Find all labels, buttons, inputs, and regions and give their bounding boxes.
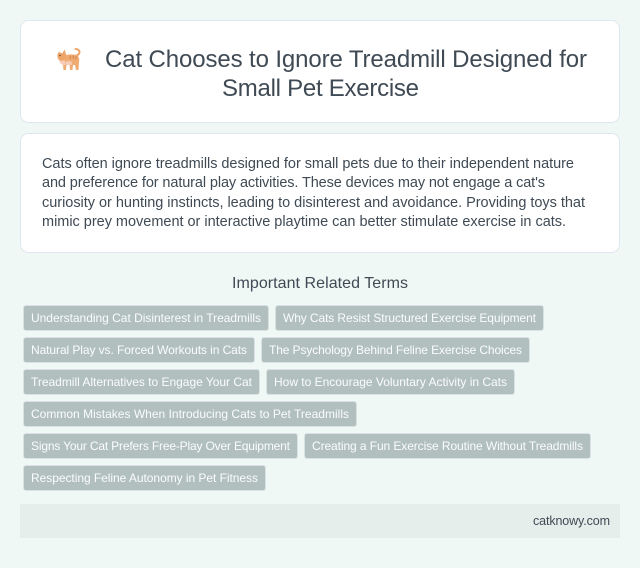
tag: Natural Play vs. Forced Workouts in Cats: [31, 343, 247, 357]
tag: Common Mistakes When Introducing Cats to Pet Treadmills: [31, 407, 349, 421]
tag: [266, 370, 514, 394]
tag: [262, 338, 530, 362]
panel: description card: [20, 134, 620, 252]
text block: description: curiosity or hunting instincts, leading to disinterest and avoidance. Providing toys that: [42, 195, 585, 211]
footer: catknowy.com: [533, 514, 610, 528]
footer: [20, 504, 620, 538]
text block: description: [42, 156, 585, 230]
panel: title card: [20, 20, 620, 122]
tag: [304, 434, 590, 458]
tag: Respecting Feline Autonomy in Pet Fitness: [31, 471, 258, 485]
text block: description: mimic prey movement or interactive playtime can better stimulate exercise in cats.: [42, 214, 566, 230]
title: Small Pet Exercise: [222, 75, 419, 102]
tag: [24, 402, 356, 426]
text block: description: and preference for natural play activities. These devices may not engage a cat's: [42, 175, 545, 191]
icon: cat: [57, 49, 80, 70]
tag: [24, 434, 298, 458]
tag list: related terms: [24, 306, 590, 490]
heading: related terms: Important Related Terms: [232, 275, 408, 292]
tag: Signs Your Cat Prefers Free-Play Over Equipment: [31, 439, 291, 453]
tag: Creating a Fun Exercise Routine Without Treadmills: [312, 439, 583, 453]
tag: [24, 370, 260, 394]
tag: Why Cats Resist Structured Exercise Equipment: [283, 311, 537, 325]
tag: [24, 306, 268, 330]
text block: description: Cats often ignore treadmills designed for small pets due to their independent nature: [42, 156, 574, 172]
tag: [276, 306, 544, 330]
tag: Understanding Cat Disinterest in Treadmills: [31, 311, 261, 325]
tag: Treadmill Alternatives to Engage Your Cat: [31, 375, 253, 389]
tag: [24, 338, 254, 362]
tag: How to Encourage Voluntary Activity in Cats: [274, 375, 507, 389]
tag: [24, 466, 266, 490]
title: [105, 46, 587, 102]
title: Cat Chooses to Ignore Treadmill Designed for: [105, 46, 587, 73]
tag: The Psychology Behind Feline Exercise Choices: [269, 343, 522, 357]
